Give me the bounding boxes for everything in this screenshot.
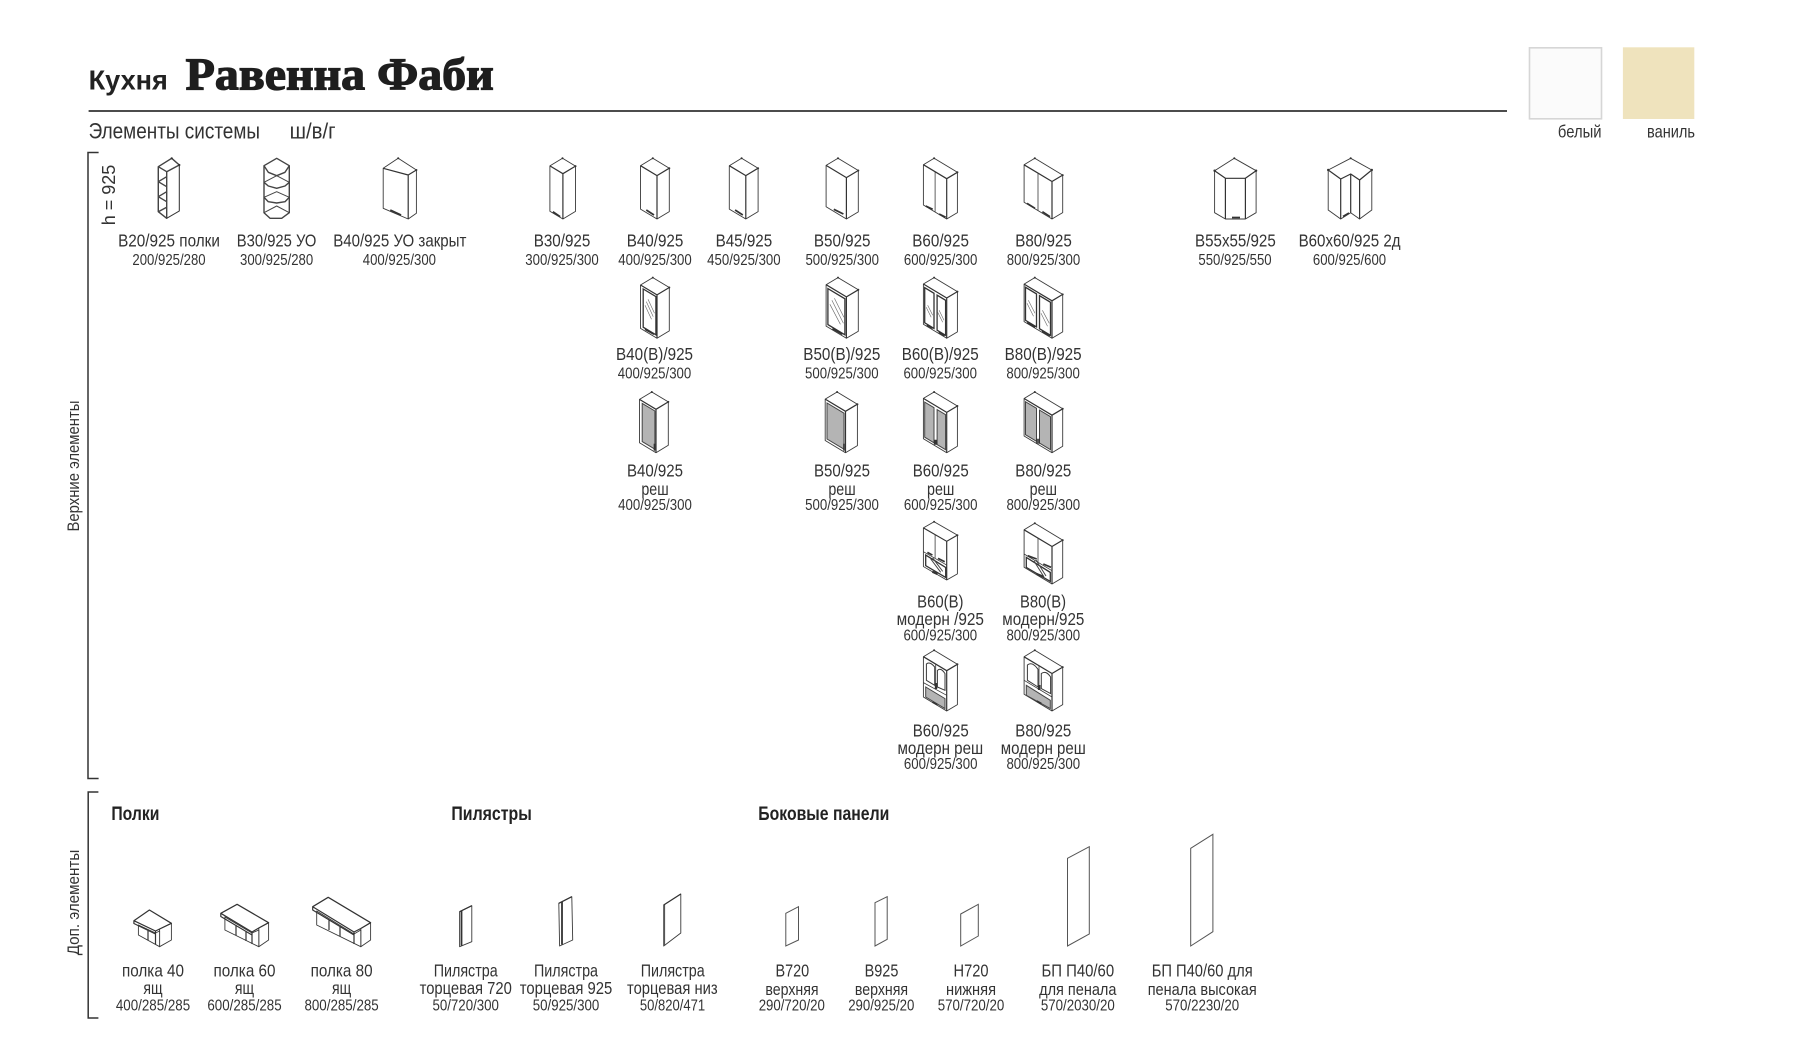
swatch label: белый: белый xyxy=(1558,121,1602,141)
label: В60/925 xyxy=(913,461,969,481)
label: В30/925 xyxy=(534,231,590,251)
icon: cabinet xyxy=(640,157,670,219)
label: В50(В)/925 xyxy=(803,344,880,364)
label: В50/925 xyxy=(814,231,870,251)
item: В20/925 полки xyxy=(118,157,220,269)
label: реш xyxy=(828,479,856,499)
label: 800/285/285 xyxy=(304,998,379,1015)
swatch: белый xyxy=(1530,48,1602,119)
panel: additional elements xyxy=(64,792,1257,1018)
label: В80/925 xyxy=(1015,461,1071,481)
heading: Боковые панели: Боковые панели xyxy=(758,803,889,825)
label: В30/925 УО xyxy=(237,231,316,251)
label xyxy=(237,231,316,269)
icon: glass door cabinet xyxy=(1024,277,1064,338)
label xyxy=(1001,721,1086,773)
label: торцевая 720 xyxy=(420,978,512,998)
label: 400/925/300 xyxy=(363,252,436,269)
label: 800/925/300 xyxy=(1007,252,1081,269)
section label: Верхние элементы xyxy=(64,400,83,532)
icon: shelf with drawers xyxy=(221,904,269,947)
title prefix: Кухня xyxy=(89,64,168,95)
icon: cabinet xyxy=(923,157,958,219)
item: В60/925 xyxy=(904,157,978,269)
label: ящ xyxy=(235,978,254,998)
icon: side panel xyxy=(1068,847,1089,946)
label xyxy=(627,961,718,1015)
item: В80/925 реш xyxy=(1006,391,1080,514)
label xyxy=(904,231,978,269)
label xyxy=(1002,592,1084,645)
section bracket xyxy=(88,792,98,1018)
label: В40/925 xyxy=(627,461,683,481)
label: полка 80 xyxy=(311,961,373,981)
icon: closed cabinet xyxy=(383,157,417,219)
title xyxy=(89,49,494,99)
label: 500/925/300 xyxy=(805,252,879,269)
swatch label: ваниль: ваниль xyxy=(1647,121,1695,141)
label xyxy=(1006,461,1080,514)
label xyxy=(1007,231,1081,269)
item: В80(В)/925 xyxy=(1005,277,1082,382)
label xyxy=(207,961,282,1015)
label: 600/925/300 xyxy=(903,365,977,382)
label: 300/925/280 xyxy=(240,252,314,269)
item: В80/925 xyxy=(1007,157,1081,269)
label: Пилястра xyxy=(641,961,705,981)
label: 550/925/550 xyxy=(1198,252,1272,269)
icon: L-shaped corner cabinet xyxy=(1327,157,1373,219)
label xyxy=(938,961,1005,1015)
item: В40/925 реш xyxy=(618,391,692,514)
icon: cabinet xyxy=(1024,157,1064,219)
item: В720 верхняя xyxy=(759,907,825,1015)
label xyxy=(1195,231,1276,269)
item: В80(В) модерн/925 xyxy=(1002,522,1084,645)
label: модерн /925 xyxy=(897,609,984,629)
label: 600/925/300 xyxy=(904,252,978,269)
section bracket xyxy=(88,152,99,778)
label: 50/925/300 xyxy=(533,998,600,1015)
item: БП П40/60 для пенала высокая xyxy=(1148,834,1257,1015)
label: 800/925/300 xyxy=(1006,497,1080,514)
label: В60(В)/925 xyxy=(902,344,979,364)
section label: Доп. элементы xyxy=(64,850,83,955)
label: 400/925/300 xyxy=(618,365,692,382)
label: верхняя xyxy=(855,981,908,999)
label: В80(В) xyxy=(1020,592,1066,612)
icon: pilaster xyxy=(460,906,472,947)
label: 200/925/280 xyxy=(132,252,206,269)
icon: glass door cabinet xyxy=(826,277,859,338)
label: 600/925/300 xyxy=(903,628,977,645)
subtitle: Элементы системы xyxy=(89,118,260,143)
label: В20/925 полки xyxy=(118,231,220,251)
label xyxy=(525,231,599,269)
label xyxy=(805,231,879,269)
label: верхняя xyxy=(765,981,819,999)
label: полка 60 xyxy=(214,961,276,981)
item: В30/925 УО xyxy=(237,158,316,269)
icon: modern glass flap cabinet xyxy=(1024,522,1064,584)
item: Пилястра торцевая 720 xyxy=(420,906,512,1015)
icon: pilaster xyxy=(559,897,573,946)
label xyxy=(116,961,190,1015)
label: 600/925/300 xyxy=(904,497,978,514)
icon: corner shelf cabinet xyxy=(264,158,289,218)
icon: shelf with drawers xyxy=(134,910,171,947)
label: В40(В)/925 xyxy=(616,344,693,364)
label: Пилястра xyxy=(534,961,598,981)
item: В60х60/925 2д xyxy=(1299,157,1401,269)
label: В60/925 xyxy=(913,721,969,741)
label xyxy=(118,231,220,269)
label: для пенала xyxy=(1039,981,1117,999)
label: 400/285/285 xyxy=(116,998,190,1015)
label: 450/925/300 xyxy=(707,252,781,269)
label: В60/925 xyxy=(912,231,969,251)
swatch: ваниль xyxy=(1623,47,1694,119)
label: 50/820/471 xyxy=(640,998,705,1015)
icon: side panel xyxy=(875,897,887,946)
label xyxy=(304,961,379,1015)
label xyxy=(616,344,693,382)
label xyxy=(1005,344,1082,382)
label: 600/925/300 xyxy=(904,756,978,773)
item: В80/925 модерн реш xyxy=(1001,649,1086,773)
label: торцевая низ xyxy=(627,978,718,998)
label: 290/925/20 xyxy=(848,998,915,1015)
icon: glass door cabinet xyxy=(640,277,670,338)
height label: h = 925 xyxy=(99,165,119,225)
icon: side panel xyxy=(961,904,978,946)
label xyxy=(618,461,692,514)
label: 570/720/20 xyxy=(938,998,1005,1015)
label: 800/925/300 xyxy=(1006,756,1080,773)
label: полка 40 xyxy=(122,961,184,981)
label xyxy=(759,961,825,1015)
title main: Равенна Фаби xyxy=(186,49,494,99)
item: В40/925 xyxy=(618,157,692,269)
label: реш xyxy=(1030,479,1057,499)
label: 600/285/285 xyxy=(207,998,282,1015)
label xyxy=(1039,961,1117,1015)
label xyxy=(420,961,512,1015)
label xyxy=(848,961,915,1015)
label: В55х55/925 xyxy=(1195,231,1276,251)
label: 600/925/600 xyxy=(1313,252,1386,269)
item: Пилястра торцевая 925 xyxy=(520,897,612,1015)
label xyxy=(897,592,984,645)
panel: upper elements xyxy=(64,152,1401,778)
label: 570/2230/20 xyxy=(1165,998,1239,1015)
item: В925 верхняя xyxy=(848,897,915,1015)
icon: modern lattice flap cabinet xyxy=(1024,649,1064,711)
item: Н720 нижняя xyxy=(938,904,1005,1015)
label: торцевая 925 xyxy=(520,978,612,998)
label: модерн/925 xyxy=(1002,609,1084,629)
label: 400/925/300 xyxy=(618,252,692,269)
label: модерн реш xyxy=(897,738,983,758)
label: 500/925/300 xyxy=(805,365,879,382)
label: В60(В) xyxy=(917,592,963,612)
item: В30/925 xyxy=(525,157,599,269)
label xyxy=(805,461,879,514)
icon: lattice door cabinet xyxy=(640,391,669,453)
label: В80/925 xyxy=(1015,231,1072,251)
icon: corner cabinet xyxy=(1213,157,1257,219)
label: 290/720/20 xyxy=(759,998,825,1015)
icon: glass door cabinet xyxy=(923,277,958,338)
label xyxy=(333,231,466,269)
icon: modern lattice flap cabinet xyxy=(923,649,958,711)
label: Н720 xyxy=(954,961,989,981)
subtitle: ш/в/г xyxy=(290,118,336,143)
label: В80/925 xyxy=(1015,721,1071,741)
label: реш xyxy=(927,479,954,499)
heading: Пилястры: Пилястры xyxy=(451,803,532,825)
icon: lattice door cabinet xyxy=(825,391,858,453)
label: В50/925 xyxy=(814,461,870,481)
item: В60(В) модерн /925 xyxy=(897,521,984,645)
label: 400/925/300 xyxy=(618,497,692,514)
icon: side panel xyxy=(1191,834,1213,946)
label: 570/2030/20 xyxy=(1041,998,1115,1015)
label: 800/925/300 xyxy=(1006,628,1080,645)
label: Пилястра xyxy=(434,961,498,981)
label xyxy=(897,721,983,773)
label: нижняя xyxy=(946,981,996,999)
label: БП П40/60 xyxy=(1041,961,1114,981)
label: В925 xyxy=(865,961,898,981)
item: полка 40 ящ xyxy=(116,910,190,1015)
icon: cabinet xyxy=(550,157,576,219)
item: полка 80 ящ xyxy=(304,897,379,1015)
item: В40(В)/925 xyxy=(616,277,693,382)
item: В50(В)/925 xyxy=(803,277,880,382)
heading: Полки: Полки xyxy=(111,803,159,825)
icon: open shelf cabinet xyxy=(158,157,180,218)
item: В60/925 модерн реш xyxy=(897,649,983,773)
icon: cabinet xyxy=(729,157,759,219)
item: В50/925 xyxy=(805,157,879,269)
label: В45/925 xyxy=(716,231,772,251)
label: БП П40/60 для xyxy=(1152,961,1253,981)
label: В720 xyxy=(775,961,809,981)
label: В60х60/925 2д xyxy=(1299,231,1401,251)
icon: shelf with drawers xyxy=(313,897,371,947)
label: модерн реш xyxy=(1001,738,1086,758)
label xyxy=(520,961,612,1015)
item: В60/925 реш xyxy=(904,391,978,514)
label: реш xyxy=(641,479,669,499)
label xyxy=(803,344,880,382)
label xyxy=(902,344,979,382)
label: пенала высокая xyxy=(1148,981,1257,999)
label: ящ xyxy=(143,978,163,998)
label xyxy=(1148,961,1257,1015)
icon: lattice door cabinet xyxy=(923,391,958,453)
item: полка 60 ящ xyxy=(207,904,282,1015)
item: Пилястра торцевая низ xyxy=(627,894,718,1015)
colour swatches legend xyxy=(1530,47,1695,141)
label: 800/925/300 xyxy=(1006,365,1080,382)
label xyxy=(618,231,692,269)
item: БП П40/60 для пенала xyxy=(1039,847,1117,1015)
icon: modern glass flap cabinet xyxy=(923,521,958,580)
label xyxy=(1299,231,1401,269)
label xyxy=(707,231,781,269)
label xyxy=(904,461,978,514)
icon: pilaster xyxy=(664,894,681,946)
label: В40/925 УО закрыт xyxy=(333,231,466,251)
item: В40/925 УО закрыт xyxy=(333,157,466,269)
icon: side panel xyxy=(786,907,798,946)
icon: lattice door cabinet xyxy=(1024,391,1064,453)
item: В60(В)/925 xyxy=(902,277,979,382)
item: В50/925 реш xyxy=(805,391,879,514)
label: В80(В)/925 xyxy=(1005,344,1082,364)
label: ящ xyxy=(332,978,351,998)
label: 300/925/300 xyxy=(525,252,599,269)
icon: cabinet xyxy=(826,157,859,219)
label: 500/925/300 xyxy=(805,497,879,514)
label: В40/925 xyxy=(627,231,683,251)
item: В45/925 xyxy=(707,157,781,269)
label: 50/720/300 xyxy=(432,998,499,1015)
item: В55х55/925 xyxy=(1195,157,1276,269)
